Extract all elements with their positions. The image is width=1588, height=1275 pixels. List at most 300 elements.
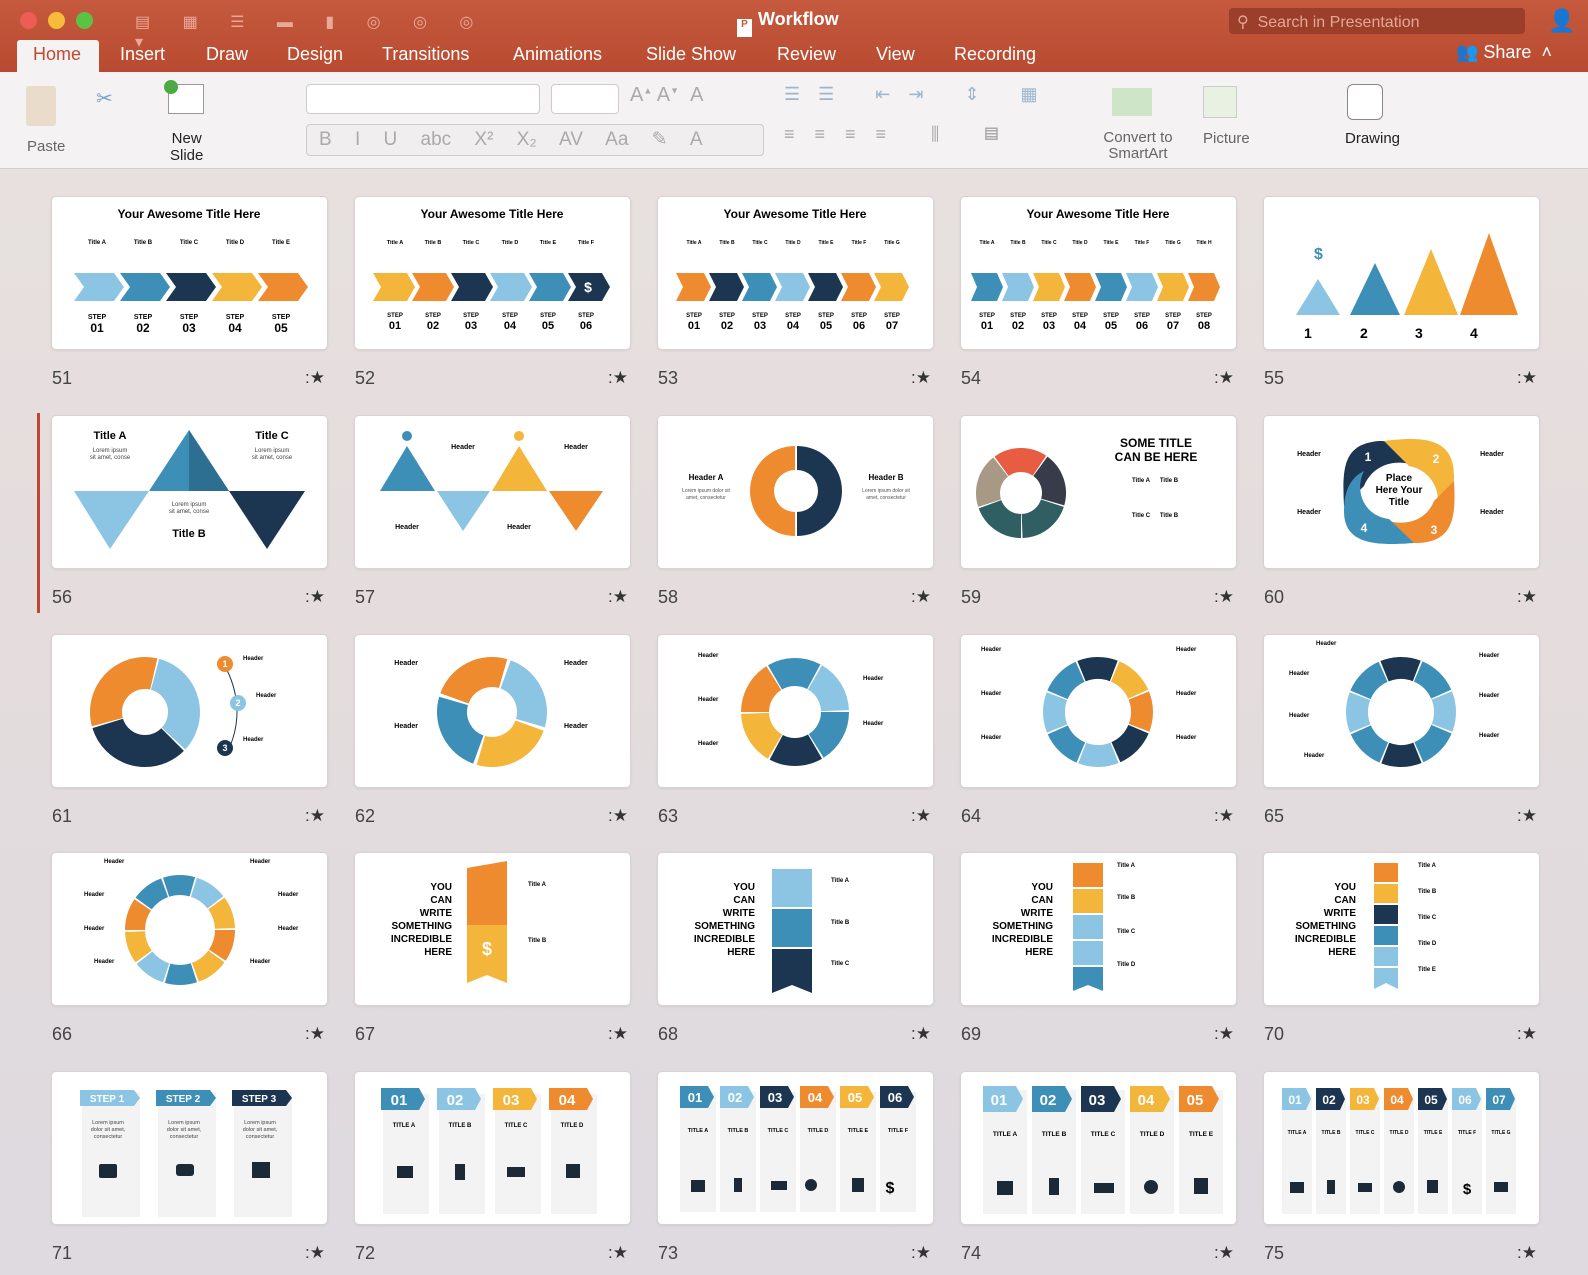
slide 52: STEP <box>502 313 518 319</box>
slide 60: Here Your <box>1376 485 1423 496</box>
slide 53: STEP <box>851 313 867 319</box>
slide 65 <box>1264 635 1539 787</box>
slide 54: 04 <box>1074 320 1087 332</box>
slide 68: Title A <box>831 878 850 884</box>
slide 72: 01 <box>391 1092 407 1109</box>
slide numbers and star icons: 71 <box>52 1243 72 1263</box>
slide 75: TITLE E <box>1424 1130 1443 1136</box>
slide numbers and star icons: 57 <box>355 587 375 607</box>
slide numbers and star icons: :★ <box>305 1243 325 1262</box>
slide 61: 1 <box>222 659 228 669</box>
slide 54: 08 <box>1198 320 1210 332</box>
slide 67: YOU <box>430 882 452 893</box>
slide 75: 03 <box>1356 1093 1370 1107</box>
slide 73: TITLE D <box>808 1128 828 1134</box>
slide 52: 02 <box>427 320 439 332</box>
title bar <box>0 0 1588 72</box>
slide numbers and star icons: :★ <box>1517 806 1537 825</box>
slide 73: $ <box>886 1180 895 1197</box>
slide 71: dolor sit amet, <box>243 1127 278 1133</box>
slide 60: 4 <box>1361 521 1368 535</box>
slide 61: Header <box>243 737 264 743</box>
convert to smartart: SmartArt <box>1108 145 1168 162</box>
slide 65: Header <box>1479 733 1500 739</box>
slide numbers and star icons: 51 <box>52 368 72 388</box>
slide numbers and star icons: 66 <box>52 1024 72 1044</box>
slide 54: 03 <box>1043 320 1055 332</box>
slide 52: Title E <box>540 240 557 246</box>
slide numbers and star icons: 54 <box>961 368 981 388</box>
tabs: Insert <box>120 44 165 64</box>
slide 71: STEP 2 <box>166 1094 201 1105</box>
new slide: New <box>172 130 202 147</box>
slide 59: Title C <box>1132 513 1151 519</box>
picture <box>1203 86 1237 118</box>
slide 75: TITLE A <box>1288 1130 1307 1136</box>
slide numbers and star icons: :★ <box>608 1243 628 1262</box>
slide 69: CAN <box>1031 895 1053 906</box>
slide 53: 04 <box>787 320 800 332</box>
slide 61: 3 <box>222 743 228 753</box>
ribbon: A▲ A▼ A <box>630 84 703 106</box>
slide 75: 01 <box>1288 1093 1302 1107</box>
tabs: Review <box>777 44 836 64</box>
slide 51: Title B <box>134 240 153 246</box>
slide 66: Header <box>84 926 105 932</box>
slide 74: 05 <box>1187 1092 1203 1109</box>
slide 69: HERE <box>1025 947 1053 958</box>
slide 56: Title B <box>172 528 206 540</box>
slide 54: STEP <box>1134 313 1150 319</box>
slide 52: $ <box>584 279 592 295</box>
slide 72: 03 <box>503 1092 519 1109</box>
slide 59 <box>961 416 1236 568</box>
slide 73: TITLE C <box>768 1128 788 1134</box>
slide 75 <box>1264 1072 1539 1224</box>
slide numbers and star icons: :★ <box>305 587 325 606</box>
slide 53: Title F <box>852 240 866 246</box>
slide 55: 4 <box>1470 325 1478 341</box>
slide 69: INCREDIBLE <box>992 934 1053 945</box>
slide 54: Title G <box>1165 240 1181 246</box>
slide 54: Title D <box>1072 240 1088 246</box>
slide 58: Lorem ipsum dolor sit <box>682 488 731 494</box>
slide 52: STEP <box>540 313 556 319</box>
slide numbers and star icons: 58 <box>658 587 678 607</box>
tabs: 👥 Share ˄ <box>1456 42 1552 62</box>
slide 51: 02 <box>136 321 150 335</box>
slide 66: Header <box>84 892 105 898</box>
slide numbers and star icons: :★ <box>911 1024 931 1043</box>
slide 54: Your Awesome Title Here <box>1027 207 1170 221</box>
slide 70: WRITE <box>1324 908 1356 919</box>
slide 68: WRITE <box>723 908 755 919</box>
slide 73: 04 <box>808 1090 823 1105</box>
slide 56: sit amet, conse <box>252 455 293 461</box>
slide 67: HERE <box>424 947 452 958</box>
slide numbers and star icons: :★ <box>911 1243 931 1262</box>
slide 71: consectetur <box>170 1134 198 1140</box>
slide 57: Header <box>507 524 531 531</box>
slide 51: STEP <box>180 314 198 321</box>
tabs: Home <box>33 44 81 64</box>
slide numbers and star icons: :★ <box>608 806 628 825</box>
slide 56: Lorem ipsum <box>255 448 289 454</box>
slide 61: Header <box>256 693 277 699</box>
paste group <box>26 86 113 155</box>
slide 54: 07 <box>1167 320 1179 332</box>
slide numbers and star icons: :★ <box>305 368 325 387</box>
slide 63: Header <box>863 721 884 727</box>
slide 74: 04 <box>1138 1092 1155 1109</box>
ribbon: Drawing <box>1345 130 1400 147</box>
slide 58 <box>658 416 933 568</box>
slide 51: Your Awesome Title Here <box>118 207 261 221</box>
slide 54: STEP <box>1072 313 1088 319</box>
slide 70: Title E <box>1418 967 1436 973</box>
slide 51: 05 <box>274 321 288 335</box>
slide 75: 02 <box>1322 1093 1336 1107</box>
slide 66: Header <box>250 859 271 865</box>
slide 70: SOMETHING <box>1295 921 1356 932</box>
slide 69: YOU <box>1031 882 1053 893</box>
slide numbers and star icons: 59 <box>961 587 981 607</box>
selected slide indicator <box>37 413 40 613</box>
slide 69: WRITE <box>1021 908 1053 919</box>
slide 68: Title B <box>831 920 850 926</box>
slide 59: SOME TITLE <box>1120 436 1192 450</box>
slide 52: Title A <box>387 240 403 246</box>
slide numbers and star icons: :★ <box>911 806 931 825</box>
slide numbers and star icons: 73 <box>658 1243 678 1263</box>
slide 58: amet, consectetur <box>866 495 906 501</box>
new slide: Slide <box>170 147 203 164</box>
search box: ⚲ Search in Presentation <box>1237 14 1419 31</box>
slide numbers and star icons: 56 <box>52 587 72 607</box>
ribbon: ≡≡≡≡ ⫼ ▤ <box>784 124 1019 144</box>
slide 60: Header <box>1480 451 1504 458</box>
slide 75: 05 <box>1424 1093 1438 1107</box>
slide 73: TITLE A <box>688 1128 708 1134</box>
slide 54: Title F <box>1135 240 1149 246</box>
slide 51: STEP <box>272 314 290 321</box>
slide 53: 03 <box>754 320 766 332</box>
slide 58: Header A <box>689 473 724 482</box>
slide 74: TITLE B <box>1042 1131 1067 1138</box>
tabs: View <box>876 44 915 64</box>
slide 70: Title C <box>1418 915 1437 921</box>
slide 51: Title A <box>88 240 107 246</box>
slide 72: 02 <box>447 1092 463 1109</box>
slide 54: STEP <box>1165 313 1181 319</box>
slide 55: 1 <box>1304 325 1312 341</box>
slide numbers and star icons: 63 <box>658 806 678 826</box>
slide 51 <box>52 197 327 349</box>
slide numbers and star icons: 70 <box>1264 1024 1284 1044</box>
slide 53: STEP <box>686 313 702 319</box>
slide 58: Lorem ipsum dolor sit <box>862 488 911 494</box>
slide 52: 03 <box>465 320 477 332</box>
slide 74: TITLE C <box>1091 1131 1116 1138</box>
slide 59: CAN BE HERE <box>1115 450 1197 464</box>
slide 68: INCREDIBLE <box>694 934 755 945</box>
slide 64: Header <box>1176 735 1197 741</box>
slide numbers and star icons: 68 <box>658 1024 678 1044</box>
slide 54: Title A <box>979 240 995 246</box>
slide 70 <box>1264 853 1539 1005</box>
slide 53: 02 <box>721 320 733 332</box>
slide 66: Header <box>278 892 299 898</box>
slide 57 <box>355 416 630 568</box>
tabs <box>17 40 1552 72</box>
slide 53: STEP <box>719 313 735 319</box>
slide 68: CAN <box>733 895 755 906</box>
slide 61 <box>52 635 327 787</box>
slide 53: Title E <box>819 240 834 246</box>
slide 57: Header <box>564 444 588 451</box>
tabs: Design <box>287 44 343 64</box>
slide 70: Title A <box>1418 863 1437 869</box>
tabs: Animations <box>513 44 602 64</box>
slide 66: Header <box>104 859 125 865</box>
slide numbers and star icons: :★ <box>1517 587 1537 606</box>
slide numbers and star icons: :★ <box>608 1024 628 1043</box>
paste group: Paste <box>27 138 65 155</box>
slide 54: STEP <box>1103 313 1119 319</box>
slide 58: amet, consectetur <box>686 495 726 501</box>
slide 53: Your Awesome Title Here <box>724 207 867 221</box>
slide 65: Header <box>1479 693 1500 699</box>
slide 60 <box>1264 416 1539 568</box>
slide numbers and star icons: 67 <box>355 1024 375 1044</box>
slide numbers and star icons: 53 <box>658 368 678 388</box>
slide 53: STEP <box>884 313 900 319</box>
slide numbers and star icons: 55 <box>1264 368 1284 388</box>
slide 61: Header <box>243 656 264 662</box>
convert to smartart <box>1103 129 1173 162</box>
slide numbers and star icons: :★ <box>911 368 931 387</box>
slide numbers and star icons: :★ <box>608 587 628 606</box>
slide 64: Header <box>1176 691 1197 697</box>
slide 72: 04 <box>559 1092 576 1109</box>
slide 53: Title C <box>752 240 768 246</box>
slide 70: HERE <box>1328 947 1356 958</box>
slide 71: dolor sit amet, <box>91 1127 126 1133</box>
slide 58: Header B <box>868 473 904 482</box>
slide numbers and star icons: 72 <box>355 1243 375 1263</box>
slide numbers and star icons: 61 <box>52 806 72 826</box>
slide 71: consectetur <box>246 1134 274 1140</box>
slide 54: Title C <box>1041 240 1057 246</box>
slide 56: Title C <box>255 430 289 442</box>
slide 75: 07 <box>1492 1093 1506 1107</box>
slide 72 <box>355 1072 630 1224</box>
slide 64 <box>961 635 1236 787</box>
slide 73: TITLE F <box>888 1128 909 1134</box>
slide 56 <box>52 416 327 568</box>
slide 66: Header <box>94 959 115 965</box>
slide 68 <box>658 853 933 1005</box>
slide 53: 07 <box>886 320 898 332</box>
app title: P <box>741 19 748 30</box>
slide 66 <box>52 853 327 1005</box>
slide 65: Header <box>1479 653 1500 659</box>
slide 60: Place <box>1386 473 1413 484</box>
slide 60: Title <box>1389 497 1410 508</box>
slide numbers and star icons: :★ <box>305 1024 325 1043</box>
ribbon: Picture <box>1203 130 1250 147</box>
slide 52: Title C <box>463 240 479 246</box>
slide 53: Title G <box>884 240 900 246</box>
slide 63: Header <box>698 697 719 703</box>
slide 75: TITLE F <box>1458 1130 1476 1136</box>
slide 71 <box>52 1072 327 1224</box>
slide 52: Your Awesome Title Here <box>421 207 564 221</box>
slide 67: $ <box>482 939 492 959</box>
slide 52: STEP <box>425 313 441 319</box>
slide 65: Header <box>1289 713 1310 719</box>
slide 51: STEP <box>134 314 152 321</box>
slide 68: HERE <box>727 947 755 958</box>
slide 63: Header <box>698 653 719 659</box>
slide 73: 05 <box>848 1090 862 1105</box>
slide 54: 05 <box>1105 320 1117 332</box>
ribbon <box>0 72 1588 169</box>
app title: Workflow <box>758 9 839 29</box>
tabs: Recording <box>954 44 1036 64</box>
slide 75: 04 <box>1390 1093 1404 1107</box>
slide 73: 01 <box>688 1090 702 1105</box>
slide numbers and star icons: :★ <box>1517 1243 1537 1262</box>
slide 73: 02 <box>728 1090 742 1105</box>
slide 63: Header <box>863 676 884 682</box>
slide 71: dolor sit amet, <box>167 1127 202 1133</box>
slide numbers and star icons: :★ <box>1214 806 1234 825</box>
slide 73: TITLE E <box>848 1128 869 1134</box>
slide 72: TITLE B <box>449 1123 472 1129</box>
slide 74: TITLE E <box>1189 1131 1214 1138</box>
slide 52 <box>355 197 630 349</box>
slide 53: Title B <box>719 240 735 246</box>
slide 51: STEP <box>226 314 244 321</box>
slide 64: Header <box>981 691 1002 697</box>
slide 67: SOMETHING <box>391 921 452 932</box>
slide 68: Title C <box>831 961 850 967</box>
slide 66: Header <box>250 959 271 965</box>
slide 53: STEP <box>752 313 768 319</box>
slide 60: 1 <box>1365 450 1372 464</box>
title bar: ▤ ▦ ☰ ▬ ▮ ◎ ◎ ◎ ▾ <box>135 14 487 51</box>
slide 69: SOMETHING <box>992 921 1053 932</box>
slide 54: Title H <box>1196 240 1212 246</box>
slide 51: 03 <box>182 321 196 335</box>
slide 51: 04 <box>228 321 242 335</box>
slide 51: STEP <box>88 314 106 321</box>
slide 70: CAN <box>1334 895 1356 906</box>
slide 56: Lorem ipsum <box>172 502 206 508</box>
slide 54: STEP <box>979 313 995 319</box>
slide 74: 03 <box>1089 1092 1105 1109</box>
slide 63 <box>658 635 933 787</box>
slide 52: 06 <box>580 320 592 332</box>
slide 70: Title B <box>1418 889 1437 895</box>
slide 67: CAN <box>430 895 452 906</box>
slide 62: Header <box>394 660 418 667</box>
slide 75: $ <box>1463 1181 1472 1198</box>
font controls <box>306 84 540 114</box>
slide 67: WRITE <box>420 908 452 919</box>
slide 59: Title A <box>1132 478 1151 484</box>
slide 68: YOU <box>733 882 755 893</box>
slide 75: TITLE B <box>1322 1130 1341 1136</box>
slide 68: SOMETHING <box>694 921 755 932</box>
slide 73: 03 <box>768 1090 782 1105</box>
slide 60: Header <box>1297 509 1321 516</box>
slide 56: Lorem ipsum <box>93 448 127 454</box>
slide 71: STEP 1 <box>90 1094 125 1105</box>
slide 53: 05 <box>820 320 832 332</box>
slide 60: 2 <box>1433 452 1440 466</box>
slide 51: Title D <box>226 240 245 246</box>
slide numbers and star icons: 60 <box>1264 587 1284 607</box>
slide 67: Title B <box>528 938 547 944</box>
new slide <box>164 80 204 164</box>
slide 51: Title E <box>272 240 290 246</box>
slide 55: 2 <box>1360 325 1368 341</box>
slide 59: Title B <box>1160 513 1179 519</box>
slide 64: Header <box>1176 647 1197 653</box>
slide 52: 05 <box>542 320 554 332</box>
slide 62 <box>355 635 630 787</box>
tabs: Draw <box>206 44 248 64</box>
slide 54: 06 <box>1136 320 1148 332</box>
slide 54: STEP <box>1196 313 1212 319</box>
slide 57: Header <box>395 524 419 531</box>
slide numbers and star icons: :★ <box>1214 1024 1234 1043</box>
slide 64: Header <box>981 735 1002 741</box>
slide 69: Title B <box>1117 895 1136 901</box>
slide 67: Title A <box>528 882 547 888</box>
slide 53: 06 <box>853 320 865 332</box>
slide 65: Header <box>1289 671 1310 677</box>
slide 74: TITLE D <box>1140 1131 1165 1138</box>
slide 53 <box>658 197 933 349</box>
slide 53: Title D <box>785 240 801 246</box>
slide numbers and star icons: :★ <box>305 806 325 825</box>
drawing <box>1347 84 1383 120</box>
slide 51: 01 <box>90 321 104 335</box>
slide 72: TITLE D <box>561 1123 584 1129</box>
slide 69: Title D <box>1117 962 1136 968</box>
slide 54: 02 <box>1012 320 1024 332</box>
slide numbers and star icons: 69 <box>961 1024 981 1044</box>
slide 69 <box>961 853 1236 1005</box>
slide 56: sit amet, conse <box>90 455 131 461</box>
slide 52: STEP <box>463 313 479 319</box>
slide 74: 02 <box>1040 1092 1056 1109</box>
slide 53: 01 <box>688 320 700 332</box>
window controls <box>20 12 93 29</box>
slide 73 <box>658 1072 933 1224</box>
slide numbers and star icons: :★ <box>911 587 931 606</box>
slide 54: Title B <box>1010 240 1026 246</box>
slide numbers and star icons <box>52 368 1537 1263</box>
slide 54: 01 <box>981 320 993 332</box>
slide 75: TITLE G <box>1491 1130 1511 1136</box>
slide 52: Title D <box>502 240 518 246</box>
tabs: Slide Show <box>646 44 736 64</box>
slide numbers and star icons: 64 <box>961 806 981 826</box>
